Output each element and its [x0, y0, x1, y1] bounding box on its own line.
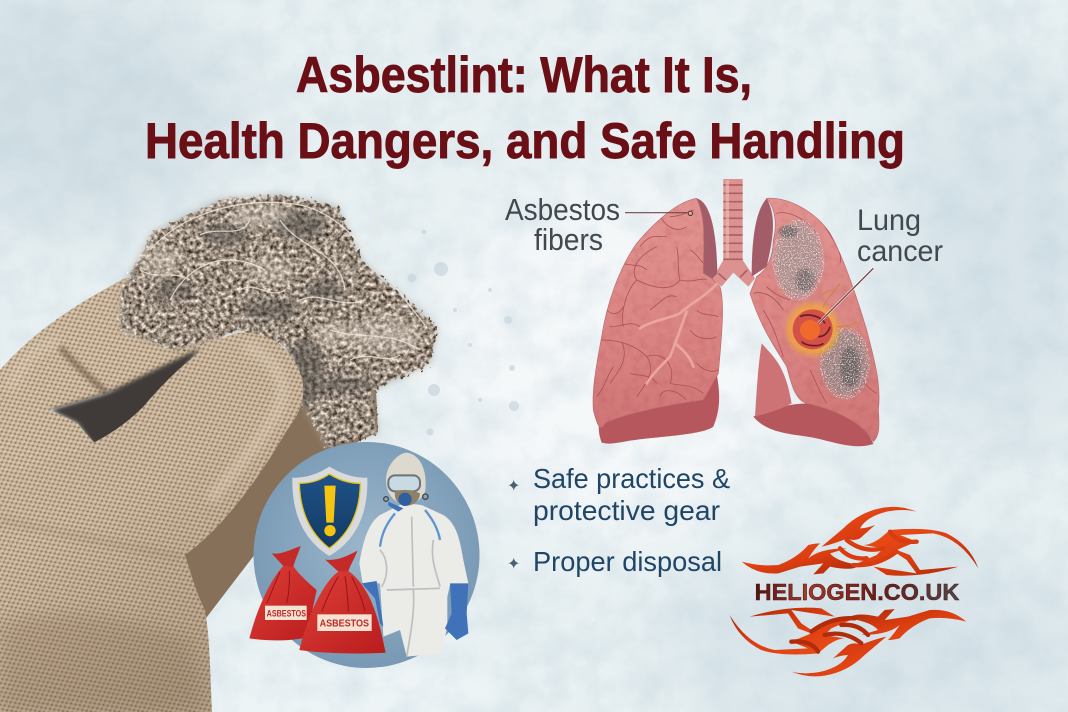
label: lung cancer: Lung — [857, 204, 921, 237]
worker in protective suit — [359, 453, 468, 657]
second finger — [0, 396, 98, 480]
bullet: safe practices — [507, 463, 730, 526]
label: lung cancer: cancer — [857, 235, 943, 268]
bullet: proper disposal: ✦ — [507, 556, 520, 573]
back upper finger — [0, 278, 240, 410]
left red asbestos bag — [249, 546, 317, 640]
label: asbestos fibers: fibers — [534, 222, 603, 257]
label: asbestos fibers: Asbestos — [505, 192, 620, 227]
bullet list: safe handling — [507, 463, 730, 577]
logo wordmark: HELIOGEN.CO.UK — [755, 579, 959, 605]
tribal flame top — [742, 507, 978, 576]
photo: knitted glove holding asbestos lint — [0, 195, 437, 712]
title — [145, 47, 905, 169]
right red asbestos bag: ASBESTOS — [320, 619, 369, 630]
title: Asbestlint: What It Is, — [296, 47, 752, 103]
label: asbestos fibers — [505, 192, 620, 257]
logo: Heliogen.co.uk — [730, 507, 978, 676]
trachea and bronchi — [712, 179, 755, 287]
bullet: safe practices: Safe practices & — [533, 463, 730, 494]
callout line: asbestos fibers — [625, 211, 692, 215]
panel: safe handling disc — [249, 442, 480, 668]
right red asbestos bag — [299, 551, 386, 653]
label: lung cancer — [857, 204, 943, 268]
tribal flame bottom — [730, 608, 966, 676]
dark gap between fingers — [50, 348, 200, 450]
warning shield icon — [292, 467, 367, 556]
asbestos lint clump — [120, 195, 437, 447]
droplets of floating fibres — [408, 230, 519, 436]
right lung — [747, 197, 883, 446]
left lung — [590, 197, 723, 444]
lower dark finger — [170, 380, 378, 622]
bullet: safe practices: ✦ — [507, 478, 520, 495]
main glove and index finger — [0, 333, 303, 712]
callout line: lung cancer — [818, 268, 873, 323]
bullet: safe practices: protective gear — [533, 495, 720, 526]
tumour — [787, 283, 857, 355]
title: Health Dangers, and Safe Handling — [145, 113, 905, 169]
left red asbestos bag: ASBESTOS — [267, 608, 306, 618]
asbestos damage patches — [770, 217, 872, 400]
lungs illustration — [590, 179, 883, 446]
bullet: proper disposal: Proper disposal — [533, 546, 722, 577]
